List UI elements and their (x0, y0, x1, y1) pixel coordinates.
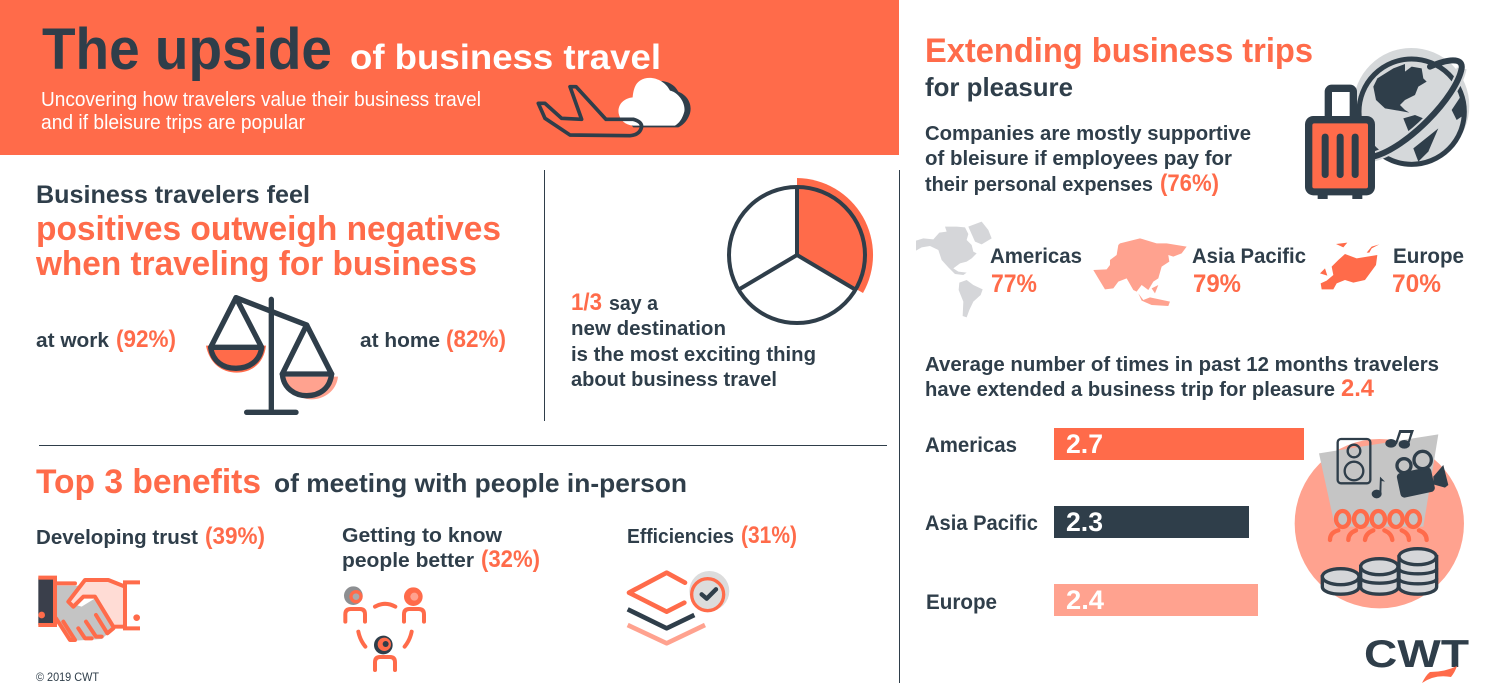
icon: suitcase and globe (1305, 48, 1469, 199)
stat text (571, 289, 816, 391)
subtitle (41, 89, 481, 134)
benefit: developing trust (36, 523, 265, 550)
benefit: getting to know people better: Getting to know (342, 524, 502, 547)
icon: map of Asia Pacific (1093, 238, 1187, 306)
icon: handshake (38, 578, 140, 641)
bar: Americas: 2.7 (1066, 429, 1103, 459)
stat text: about business travel (571, 368, 777, 391)
title: The upside (42, 17, 332, 82)
at work stat: (92%) (116, 326, 176, 353)
icon: three people (344, 586, 424, 670)
heading (36, 463, 687, 501)
icon: map of Europe (1320, 243, 1379, 289)
at home stat: at home (360, 329, 440, 352)
subtitle: and if bleisure trips are popular (41, 112, 305, 134)
region: Europe: 70% (1392, 270, 1441, 298)
heading (925, 32, 1313, 102)
benefit: getting to know people better (342, 524, 540, 573)
bar chart: extensions by region (925, 428, 1304, 616)
subtitle: Uncovering how travelers value their business travel (41, 89, 481, 111)
panel: top 3 benefits (36, 463, 797, 670)
benefit: getting to know people better: people better (342, 549, 474, 572)
text: companies supportive: of bleisure if employees pay for (925, 147, 1232, 170)
icon: concert, audience and coins (1295, 430, 1464, 608)
at work stat: at work (36, 329, 110, 352)
heading: when traveling for business (35, 245, 477, 283)
icon: map of Americas (916, 222, 992, 317)
bar: Asia Pacific (925, 506, 1249, 538)
text: average number of extended trips: have extended a business trip for pleasure (925, 378, 1335, 401)
at work stat (36, 326, 176, 353)
text: average number of extended trips: 2.4 (1341, 375, 1375, 402)
region: Asia Pacific: Asia Pacific (1192, 245, 1306, 268)
region: Americas (916, 222, 1082, 317)
icon: plane and cloud (538, 78, 691, 136)
at home stat: (82%) (446, 326, 506, 353)
bar: Americas (925, 428, 1304, 460)
benefit: efficiencies (627, 522, 797, 549)
heading: for pleasure (925, 72, 1073, 102)
logo: CWT: CWT (1364, 633, 1469, 676)
title: of business travel (350, 38, 661, 77)
text: average number of extended trips: Average number of times in past 12 months travelers (925, 353, 1439, 376)
copyright: © 2019 CWT (36, 670, 100, 684)
region: Asia Pacific: 79% (1193, 270, 1241, 298)
region: Europe: Europe (1393, 245, 1464, 268)
text: companies supportive (925, 122, 1251, 197)
benefit: developing trust: (39%) (205, 523, 265, 550)
heading: of meeting with people in-person (274, 468, 687, 498)
stat text: say a (609, 292, 659, 315)
region: Americas: 77% (991, 270, 1037, 298)
stat text: new destination (571, 317, 726, 340)
stat text: is the most exciting thing (571, 343, 816, 366)
bar: Europe: Europe (926, 591, 997, 614)
heading (35, 181, 501, 283)
heading: Business travelers feel (36, 181, 310, 209)
heading: positives outweigh negatives (36, 210, 501, 248)
region: Asia Pacific (1093, 238, 1306, 306)
bar: Europe (926, 584, 1258, 616)
bar: Asia Pacific: Asia Pacific (925, 512, 1038, 535)
panel: header banner (0, 0, 899, 155)
panel: positives outweigh negatives (35, 181, 506, 412)
panel: one third new destination (571, 178, 873, 391)
bar: Americas: Americas (925, 434, 1017, 457)
bar: Europe: 2.4 (1066, 585, 1104, 615)
text: companies supportive: Companies are mostly supportive (925, 122, 1251, 145)
stat text: 1/3 (571, 289, 602, 316)
region: Americas: Americas (990, 245, 1082, 268)
benefit: efficiencies: Efficiencies (627, 525, 734, 548)
icon: balance scales (206, 298, 338, 412)
at home stat (360, 326, 506, 353)
heading: Top 3 benefits (36, 463, 261, 501)
title (42, 17, 661, 82)
icon: stacked layers with check (628, 571, 729, 643)
text: average number of extended trips (925, 353, 1439, 402)
region: Europe (1320, 243, 1464, 298)
benefit: developing trust: Developing trust (36, 526, 198, 549)
text: companies supportive: their personal expenses (925, 173, 1153, 196)
bar: Asia Pacific: 2.3 (1066, 507, 1103, 537)
text: companies supportive: (76%) (1160, 170, 1219, 197)
benefit: getting to know people better: (32%) (481, 546, 540, 573)
panel: extending business trips (916, 32, 1469, 683)
pie chart: one third (729, 178, 873, 323)
benefit: efficiencies: (31%) (741, 522, 797, 549)
heading: Extending business trips (925, 32, 1313, 70)
